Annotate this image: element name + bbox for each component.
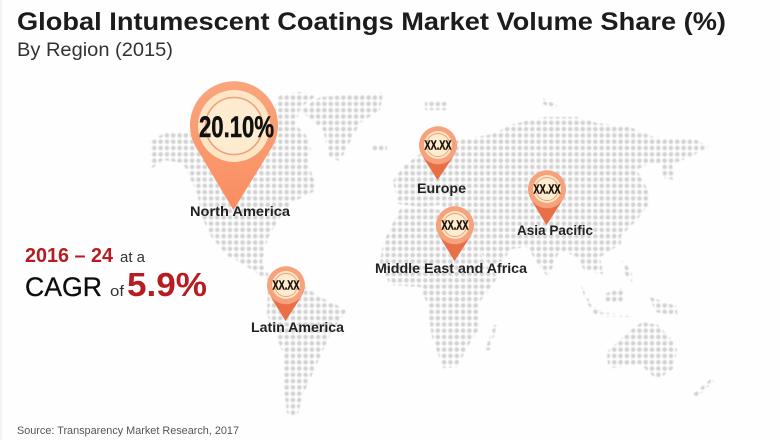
- title: Global Intumescent Coatings Market Volume Share (%): [17, 8, 726, 36]
- value: Europe: XX.XX: [424, 138, 452, 152]
- label: North America: North America: [190, 203, 290, 219]
- CAGR word: CAGR: [25, 272, 102, 302]
- map: Southeast Asian islands: [581, 260, 678, 317]
- pin: Asia Pacific: [528, 170, 566, 225]
- pin: Europe: [419, 126, 457, 180]
- label: Middle East and Africa: Middle East and Africa: [375, 260, 527, 276]
- label: Europe: Europe: [417, 180, 466, 196]
- map: Australia: [607, 322, 677, 378]
- map: Greenland: [300, 93, 383, 161]
- source note: Source: Transparency Market Research, 2017: [17, 425, 239, 437]
- CAGR connector: at a: at a: [120, 249, 146, 266]
- pin: North America: [190, 81, 278, 210]
- dotted world map: [150, 92, 714, 418]
- value: Asia Pacific: XX.XX: [534, 182, 561, 196]
- value: Middle East and Africa: XX.XX: [442, 218, 469, 232]
- value: Latin America: XX.XX: [272, 278, 300, 292]
- callout: CAGR: [25, 245, 207, 303]
- pin: Middle East and Africa: [436, 206, 474, 261]
- map: Eurasia: [393, 117, 708, 277]
- map: Arctic islands: [425, 98, 558, 110]
- map: North America: [150, 92, 317, 282]
- label: Latin America: Latin America: [251, 319, 344, 335]
- CAGR connector: of: of: [110, 283, 125, 300]
- map: Madagascar: [485, 325, 497, 350]
- CAGR period: 2016 – 24: [25, 245, 114, 267]
- map: New Zealand: [692, 378, 714, 398]
- pin: Latin America: [267, 266, 305, 321]
- map: South America: [267, 284, 347, 418]
- subtitle: By Region (2015): [17, 40, 173, 61]
- value: 20.10%: 20.10%: [199, 111, 274, 144]
- map: Africa: [380, 207, 498, 368]
- label: Asia Pacific: Asia Pacific: [517, 222, 593, 238]
- map: Iceland: [372, 145, 387, 152]
- CAGR value: 5.9%: [127, 266, 207, 303]
